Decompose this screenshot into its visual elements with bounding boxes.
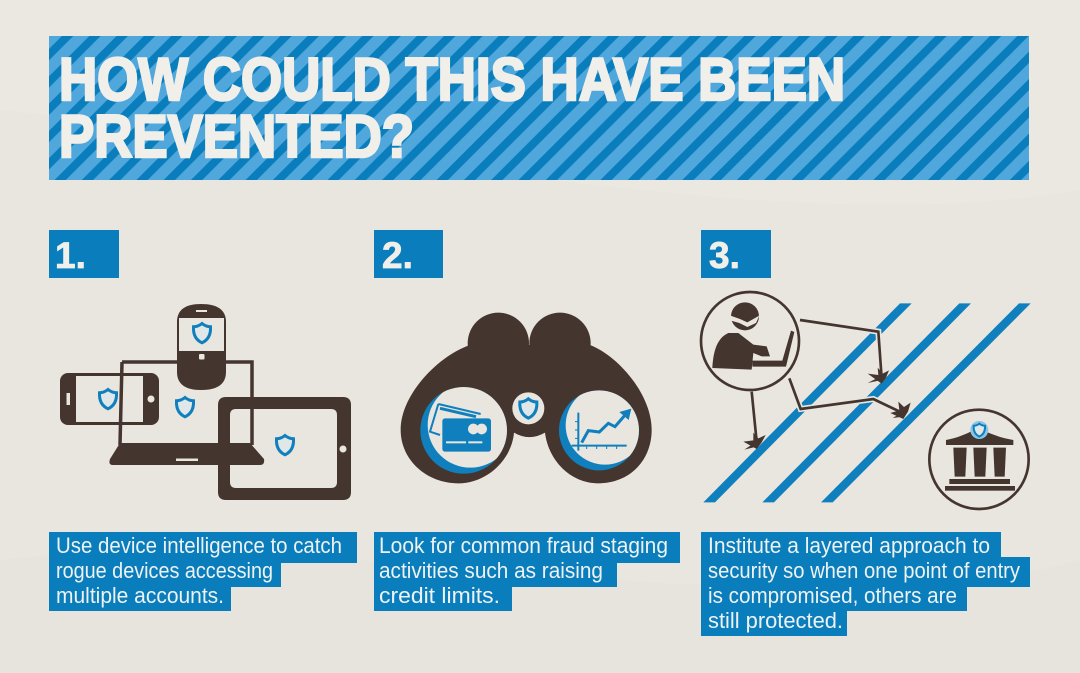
center shield [512,392,544,424]
caption 2: activities such as raising [379,558,603,583]
caption 2: Look for common fraud staging [379,533,668,558]
caption 3: still protected. [708,608,843,633]
blue security layers [703,303,1031,502]
number badge 2: 2. [382,235,413,276]
icon: landscape phone [60,373,159,425]
caption 3: security so when one point of entry [708,558,1020,583]
caption 3: is compromised, others are [708,583,957,608]
illustration: binoculars [401,313,652,483]
title: HOW COULD THIS HAVE BEEN [59,46,845,113]
icon: laptop [109,362,264,465]
caption 2 [374,532,680,611]
title banner [49,36,1029,180]
icon: tablet [218,397,351,500]
caption 1: rogue devices accessing [56,558,273,583]
attack paths [752,320,903,442]
caption 1: Use device intelligence to catch [56,533,342,558]
number badge 1: 1. [55,235,86,276]
bank icon [929,410,1029,509]
caption 1 [49,532,357,611]
number badge 2 [374,230,443,278]
hacker icon [701,292,799,390]
caption 3: Institute a layered approach to [708,533,990,558]
caption 3 [701,532,1030,636]
number badge 3 [701,230,771,278]
binoculars body [401,313,652,483]
breach marks [743,368,911,450]
number badge 1 [49,230,119,278]
left lens: credit cards [420,387,507,474]
caption 2: credit limits. [379,583,500,608]
right lens: rising chart [559,390,639,470]
title: PREVENTED? [59,103,414,170]
caption 1: multiple accounts. [56,583,224,608]
number badge 3: 3. [709,235,740,276]
illustration: layered security [701,292,1031,509]
illustration: connected devices [60,304,351,500]
title [59,46,845,170]
icon: upright phone [177,304,226,390]
